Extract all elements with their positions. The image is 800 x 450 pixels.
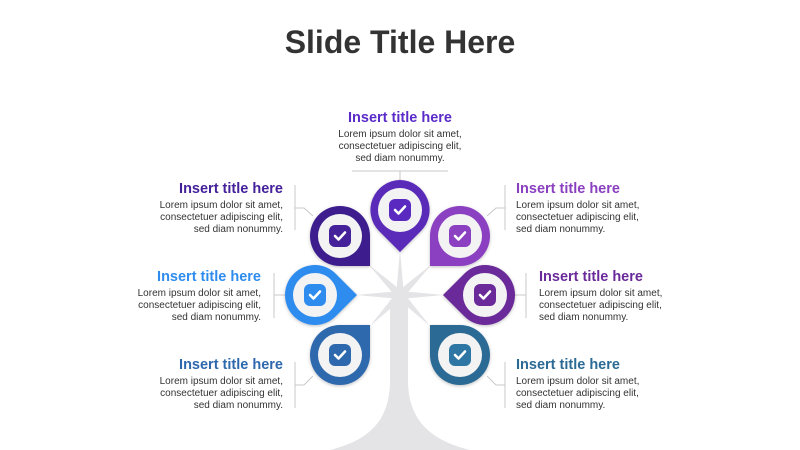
pin: lower left bbox=[310, 325, 370, 385]
text: right: Insert title here bbox=[539, 269, 643, 285]
text: lower right bbox=[516, 357, 639, 411]
text: left bbox=[138, 269, 261, 323]
text: top: consectetuer adipiscing elit, bbox=[339, 141, 461, 152]
text: upper right: consectetuer adipiscing elit, bbox=[516, 212, 639, 223]
text: lower left: Lorem ipsum dolor sit amet, bbox=[160, 376, 283, 387]
pin: left bbox=[285, 265, 357, 325]
title: Slide Title Here bbox=[285, 24, 515, 60]
text: upper right: Insert title here bbox=[516, 181, 620, 197]
text: upper right bbox=[516, 181, 639, 235]
text: right bbox=[539, 269, 662, 323]
text: top bbox=[338, 110, 462, 164]
pin: upper right bbox=[430, 206, 490, 266]
pin: upper left bbox=[310, 206, 370, 266]
text: left: Insert title here bbox=[157, 269, 261, 285]
text: right: Lorem ipsum dolor sit amet, bbox=[539, 288, 662, 299]
text: lower left: Insert title here bbox=[179, 357, 283, 373]
text: upper left: Insert title here bbox=[179, 181, 283, 197]
text: left: consectetuer adipiscing elit, bbox=[138, 300, 261, 311]
text: top: Lorem ipsum dolor sit amet, bbox=[338, 129, 462, 140]
text: right: consectetuer adipiscing elit, bbox=[539, 300, 662, 311]
tree bbox=[330, 250, 470, 450]
text: upper left: consectetuer adipiscing elit, bbox=[160, 212, 283, 223]
pin: top bbox=[370, 180, 430, 252]
connector lines bbox=[274, 171, 526, 408]
text: lower right: consectetuer adipiscing elit, bbox=[516, 388, 639, 399]
text: upper right: sed diam nonummy. bbox=[516, 224, 605, 235]
text: top: Insert title here bbox=[348, 110, 452, 126]
text: top: sed diam nonummy. bbox=[355, 153, 445, 164]
text: left: sed diam nonummy. bbox=[172, 312, 261, 323]
text: lower right: Lorem ipsum dolor sit amet, bbox=[516, 376, 639, 387]
text: right: sed diam nonummy. bbox=[539, 312, 628, 323]
text: lower right: sed diam nonummy. bbox=[516, 400, 605, 411]
text: lower right: Insert title here bbox=[516, 357, 620, 373]
pin: lower right bbox=[430, 325, 490, 385]
text: upper left: Lorem ipsum dolor sit amet, bbox=[160, 200, 283, 211]
text: upper right: Lorem ipsum dolor sit amet, bbox=[516, 200, 639, 211]
pin: right bbox=[443, 265, 515, 325]
text: upper left: sed diam nonummy. bbox=[194, 224, 283, 235]
text: left: Lorem ipsum dolor sit amet, bbox=[138, 288, 261, 299]
text: lower left: sed diam nonummy. bbox=[194, 400, 283, 411]
text: lower left bbox=[160, 357, 283, 411]
text: upper left bbox=[160, 181, 283, 235]
text: lower left: consectetuer adipiscing elit, bbox=[160, 388, 283, 399]
